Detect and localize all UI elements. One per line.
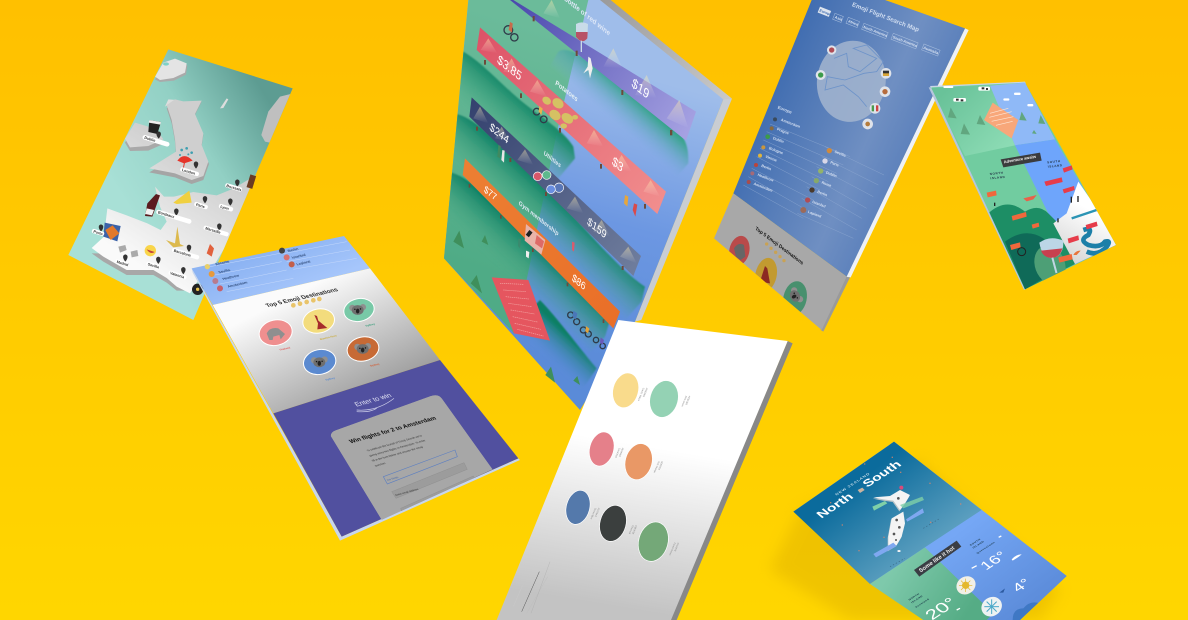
- destination list: Paris: [830, 161, 839, 167]
- heading: potatoes: Potatoes: [554, 80, 579, 104]
- list rows: Lapland: [295, 260, 312, 266]
- icon: wine glass: [1039, 238, 1063, 273]
- destination list: Berlin: [761, 164, 772, 171]
- heading: gym membership: Gym membership: [518, 201, 559, 238]
- panel: top 5 destinations and competition: [192, 236, 520, 541]
- destination list: Prague: [776, 127, 789, 135]
- entry form card: question.: [373, 461, 387, 467]
- stars: [830, 457, 961, 551]
- upper blue section: [990, 83, 1055, 145]
- title: South: [859, 458, 904, 489]
- grey destinations section: [213, 268, 440, 413]
- label: south island: ISLAND: [1047, 163, 1063, 169]
- north island temperature: NORTH: [907, 592, 920, 601]
- footer text: [513, 562, 550, 613]
- label: south island: [1047, 159, 1063, 169]
- dark banner: utilities: $159: [586, 215, 608, 242]
- heading: top 5: Top 5 Emoji Destinations: [754, 226, 804, 267]
- orange banner: gym membership: $86: [570, 272, 587, 293]
- map land: [92, 59, 293, 293]
- swatch labels: #93D2B3: [684, 395, 690, 406]
- dark banner: utilities: [469, 97, 641, 276]
- title: NEW ZEALAND: [834, 471, 871, 496]
- destination circles: Thailand: [278, 346, 292, 351]
- south island temperature: Queenstown: [975, 541, 996, 555]
- title: Emoji Flight Search Map: [851, 1, 920, 34]
- lower left section: [870, 547, 993, 620]
- destination list: Lapland: [807, 210, 822, 219]
- region tabs: [818, 7, 940, 56]
- label: south island: SOUTH: [1047, 159, 1061, 164]
- region tabs: Australia: [923, 46, 940, 56]
- panel: adventure awaits: [929, 82, 1116, 290]
- destination list: Bologna: [768, 146, 784, 156]
- upper section: [793, 442, 982, 584]
- trophy icons: [765, 242, 786, 262]
- destination circles: Sydney: [369, 362, 381, 367]
- list rows: Berlin: [287, 247, 299, 253]
- heading: utilities: Utilities: [543, 151, 562, 170]
- destination list: [743, 105, 884, 238]
- map icons: [99, 120, 256, 295]
- swatch labels: #3B3F3E: [631, 525, 637, 535]
- grey destinations section: [714, 193, 847, 330]
- label: adventure awaits: Adventure awaits: [1003, 154, 1037, 164]
- title: North: [813, 491, 856, 520]
- map labels: Paris: [196, 203, 205, 209]
- page edge: [846, 28, 969, 277]
- page base: [793, 442, 1067, 620]
- page thickness: [597, 0, 732, 322]
- purple banner: red wine: [510, 0, 696, 141]
- map labels: Madrid: [116, 260, 129, 267]
- icon: wine glass: [576, 22, 588, 52]
- map labels: Lyon: [220, 205, 229, 211]
- globe map: [812, 36, 891, 129]
- red banner: potatoes: $3.85: [496, 52, 524, 84]
- swatch labels: #74A878: [673, 542, 680, 552]
- panel: Europe map: [68, 49, 293, 320]
- entry form card: Joe Smith: [385, 475, 400, 482]
- orange banner: gym membership: [463, 158, 620, 328]
- destination list: Europe: [777, 105, 793, 115]
- panel: New Zealand north and south: [793, 442, 1067, 620]
- icon: sun: [953, 572, 979, 598]
- destination list: Sevilla: [834, 150, 847, 158]
- destination circles: [257, 296, 381, 381]
- shadow: NZ page: [770, 460, 1060, 620]
- swatch labels: Charcoal: [628, 525, 634, 535]
- swatch labels: Mint Green: [680, 395, 688, 408]
- south island temperature: 4°: [1009, 576, 1035, 595]
- enter to win heading: Enter to win: [354, 393, 393, 408]
- map labels: Valencia: [170, 271, 186, 280]
- destination circles: Buenos Aires: [319, 334, 338, 341]
- destination list: Dublin: [772, 136, 784, 144]
- list rows: Amsterdam: [226, 281, 249, 288]
- swatch labels: Forest Green: [668, 542, 676, 556]
- note diamond: [984, 103, 1018, 138]
- map labels: Sevilla: [147, 262, 160, 270]
- entry form card: Win flights for 2 to Amsterdam: [348, 415, 438, 445]
- map labels: [91, 134, 243, 280]
- purple banner: red wine: $19: [630, 76, 651, 102]
- region tabs: Europe: [819, 9, 832, 17]
- blue map section: [733, 0, 965, 277]
- map labels: Marseille: [205, 226, 221, 235]
- label: some like it hot: [914, 541, 961, 577]
- destination list: Amsterdam: [753, 182, 774, 193]
- panel: colour swatches: [497, 320, 793, 620]
- entry form card: [331, 395, 493, 520]
- destination list: Dublin: [825, 171, 837, 178]
- swatches: [562, 370, 682, 565]
- icon: snowflake: [978, 593, 1006, 620]
- dark banner: utilities: $244: [488, 121, 510, 147]
- lower right section: [925, 510, 1067, 620]
- list rows: Heathrow: [221, 274, 240, 281]
- heading: Top 5 Emoji Destinations: [264, 287, 340, 309]
- icon: plane and skiers: [994, 195, 1079, 256]
- south activity tags: [1044, 165, 1098, 243]
- destination list: Berlin: [817, 190, 828, 197]
- trophy icons: [291, 297, 322, 308]
- purple competition section: [273, 360, 518, 537]
- dark back fill: [931, 83, 1116, 289]
- destination list: Heathrow: [757, 173, 774, 183]
- south island temperature: [969, 538, 1035, 595]
- activity tags: [987, 191, 1073, 263]
- swatch labels: Soft Orange: [652, 461, 660, 474]
- NZ map: [872, 486, 924, 557]
- panel: emoji flight search map: [714, 0, 969, 332]
- snowy mountain: [1053, 182, 1116, 264]
- page edge: [929, 87, 1027, 290]
- destination list: Istanbul: [812, 200, 826, 209]
- green background: [444, 0, 588, 333]
- map labels: Bordeaux: [158, 210, 175, 219]
- north island temperature: Auckland: [914, 597, 930, 609]
- orange banner: gym membership: $77: [483, 184, 498, 203]
- red banner: potatoes: $3: [610, 154, 625, 175]
- swatch labels: #F8D98A: [642, 387, 648, 398]
- destination circles: Sydney: [324, 376, 336, 381]
- map labels: Porto: [93, 230, 104, 236]
- hills: [988, 205, 1075, 289]
- label: north island: ISLAND: [990, 175, 1006, 180]
- swatch page side: [670, 341, 793, 620]
- swatch labels: #E89765: [657, 461, 663, 471]
- list rows: [205, 242, 357, 292]
- divider diamond: [858, 488, 865, 493]
- panel: cost comparison infographic: [417, 0, 732, 410]
- label: adventure awaits: [1001, 153, 1042, 167]
- list rows: Istanbul: [291, 253, 307, 259]
- icon: utilities badges: [533, 171, 564, 194]
- red banner: potatoes: [477, 27, 666, 214]
- list rows: Alicante: [214, 260, 230, 266]
- entry form card: giving away two flights to Amsterdam. To enter: [368, 439, 426, 457]
- destination circles: Sydney: [364, 322, 376, 327]
- swatch labels: Ocean Blue: [589, 507, 596, 520]
- swatch page: [497, 320, 788, 620]
- upper green section: [931, 86, 1015, 156]
- list rows: Sevilla: [217, 268, 232, 274]
- cyclists and runners: [497, 22, 637, 349]
- swatch labels: Coral Red: [614, 447, 621, 459]
- north island temperature: ISLAND: [910, 594, 924, 604]
- south island temperature: SOUTH: [969, 538, 982, 547]
- region tabs: North America: [863, 25, 889, 38]
- map sea: [68, 49, 293, 320]
- label: north island: NORTH: [989, 171, 1004, 176]
- map labels: London: [182, 168, 196, 176]
- label: some like it hot: Some like it hot: [918, 546, 956, 574]
- destination list: Rome: [821, 181, 832, 188]
- hills: [448, 50, 689, 384]
- destination list: Amsterdam: [780, 118, 801, 129]
- note: red text diamond: [492, 277, 550, 341]
- map labels: Barcelona: [173, 249, 192, 258]
- blue background: [444, 0, 723, 410]
- title: [813, 458, 904, 520]
- swatch labels: #5478AA: [594, 507, 600, 518]
- swatch labels: Sandy Yellow: [637, 387, 644, 401]
- south island temperature: 16°: [977, 549, 1011, 573]
- swatch labels: [589, 387, 690, 556]
- region tabs: Africa: [847, 19, 860, 27]
- region tabs: Asia: [834, 15, 844, 22]
- trees: [453, 231, 580, 385]
- entry form card: fill in the form below and answer the emoji: [371, 445, 424, 462]
- map labels: Dublin: [144, 136, 156, 143]
- south island temperature: ISLAND: [971, 540, 985, 549]
- label: north island: [989, 171, 1006, 180]
- region tabs: South America: [892, 35, 918, 49]
- destination list: Vienna: [765, 155, 778, 163]
- icon: gym sign: [525, 224, 545, 255]
- map labels: Brussels: [226, 184, 242, 192]
- swatch labels: #E4808A: [618, 447, 624, 458]
- page edge: [192, 268, 520, 541]
- icon: potatoes: [541, 95, 578, 129]
- trees and clouds: [943, 86, 1045, 135]
- clouds and dashes: [890, 519, 1038, 620]
- destination circles: [729, 236, 807, 312]
- lower blue section: [1015, 139, 1116, 265]
- entry form card: Enter email address: [394, 487, 420, 497]
- blue list section: [192, 236, 370, 305]
- entry form card: To celebrate the launch of Emoji Search we're: [365, 434, 423, 452]
